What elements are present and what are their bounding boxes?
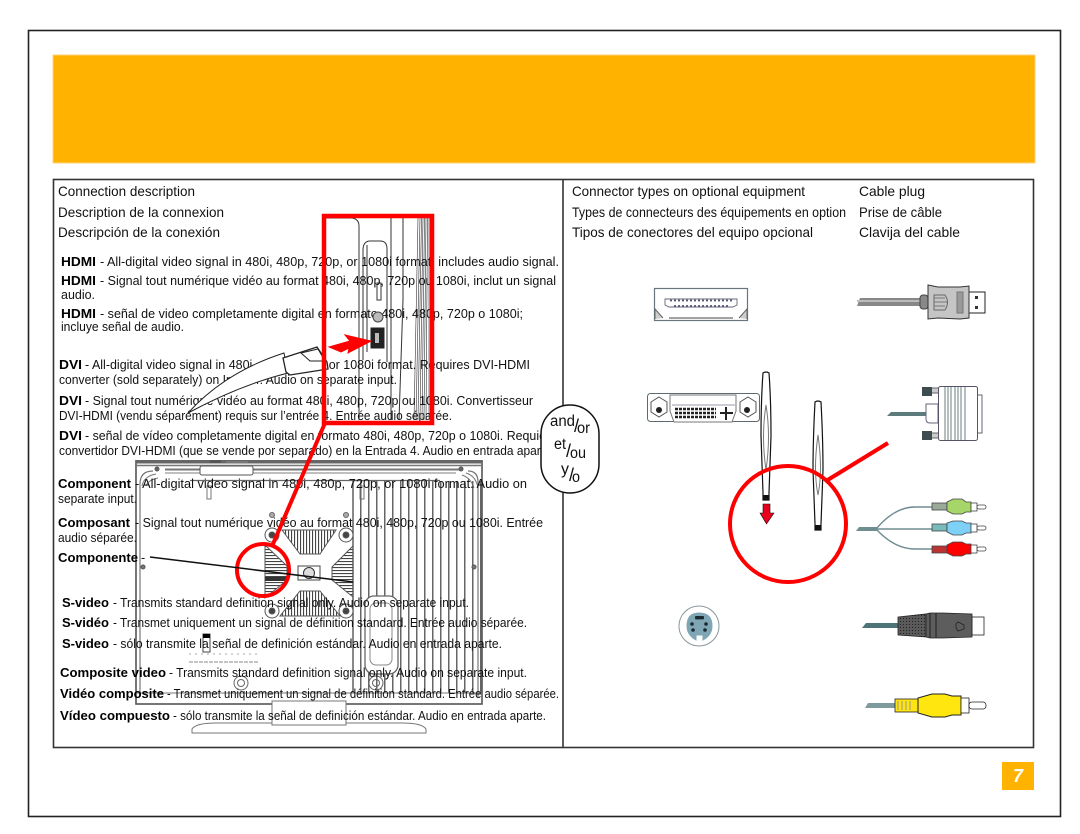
callout: and/or oval: o xyxy=(572,469,580,486)
icon: HDMI port panel details xyxy=(371,312,384,348)
callout: and/or oval: and xyxy=(550,413,575,430)
column heading: connector types xyxy=(572,183,846,240)
illustration: TV side panel lines xyxy=(325,218,429,420)
DVI descriptions: convertidor DVI-HDMI (que se vende por separado) en la Entrada 4. Audio en entrada aparte. xyxy=(59,444,554,458)
Composite video descriptions: - Transmits standard definition signal only. Audio on separate input. xyxy=(169,666,527,680)
HDMI descriptions: HDMI xyxy=(61,255,96,269)
column heading: connector types: Connector types on optional equipment xyxy=(572,183,805,199)
DVI descriptions: DVI-HDMI (vendu séparément) requis sur l’entrée 4. Entrée audio séparée. xyxy=(59,409,452,423)
icon: S-video plug xyxy=(862,613,984,638)
callout: and/or oval: / xyxy=(566,441,571,461)
DVI descriptions: converter (sold separately) on Input 4. Audio on separate input. xyxy=(59,373,397,387)
column heading: connection description: Description de la connexion xyxy=(58,204,224,220)
icon: DVI plug xyxy=(887,386,982,440)
Composite video descriptions: - sólo transmite la señal de definición estándar. Audio en entrada aparte. xyxy=(173,709,546,723)
HDMI descriptions: - Signal tout numérique vidéo au format 480i, 480p, 720p ou 1080i, inclut un signal xyxy=(100,274,556,288)
table panel xyxy=(54,179,1034,748)
callout: and/or oval xyxy=(541,405,599,493)
page number badge xyxy=(1002,762,1034,790)
S-video descriptions: S-vidéo xyxy=(62,616,109,630)
icon: S-video socket xyxy=(679,606,719,646)
Composite video descriptions: Vídeo compuesto xyxy=(60,709,170,723)
callout: and/or oval: y xyxy=(561,461,569,478)
column heading: connection description: Descripción de la conexión xyxy=(58,224,220,240)
HDMI descriptions xyxy=(61,255,559,334)
HDMI descriptions: HDMI xyxy=(61,274,96,288)
HDMI descriptions: - All-digital video signal in 480i, 480p, 720p, or 1080i format, includes audio signal. xyxy=(100,255,559,269)
DVI descriptions: - señal de vídeo completamente digital en formato 480i, 480p, 720p o 1080i. Requiere xyxy=(85,429,557,443)
DVI descriptions: - All-digital video signal in 480i, 480p, 720p, or 1080i format. Requires DVI-HDMI xyxy=(85,358,530,372)
S-video descriptions: - Transmits standard definition signal only. Audio on separate input. xyxy=(113,596,469,610)
DVI descriptions: DVI xyxy=(59,429,82,443)
blue plug xyxy=(932,521,986,535)
Component descriptions: - xyxy=(141,551,145,565)
icon: DVI socket xyxy=(648,394,760,422)
S-video descriptions: - Transmet uniquement un signal de définition standard. Entrée audio séparée. xyxy=(113,616,527,630)
column heading: connector types: Types de connecteurs des équipements en option xyxy=(572,204,846,220)
column heading: cable plug: Clavija del cable xyxy=(859,224,960,240)
red plug xyxy=(932,542,986,556)
S-video descriptions: S-video xyxy=(62,596,109,610)
green plug xyxy=(932,499,986,514)
Component descriptions: Composant xyxy=(58,516,131,530)
S-video descriptions xyxy=(62,596,527,651)
illustration: TV rear view xyxy=(136,460,482,704)
Component descriptions: Component xyxy=(58,477,132,491)
icon: antenna right xyxy=(813,401,823,530)
illustration: TV stand xyxy=(192,701,426,733)
Component descriptions: separate input. xyxy=(58,492,137,506)
icon: composite plug xyxy=(865,694,986,717)
HDMI descriptions: - señal de video completamente digital en formato 480i, 480p, 720p o 1080i; xyxy=(100,307,523,321)
HDMI descriptions: HDMI xyxy=(61,307,96,321)
HDMI descriptions: audio. xyxy=(61,288,95,302)
highlight: red pointer line xyxy=(826,443,888,481)
Composite video descriptions: Vidéo composite xyxy=(60,687,164,701)
Component descriptions: Componente xyxy=(58,551,138,565)
callout: and/or oval: ou xyxy=(570,445,586,462)
icon: antenna left xyxy=(761,372,771,500)
page number badge: 7 xyxy=(1013,766,1024,786)
HDMI descriptions: incluye señal de audio. xyxy=(61,320,184,334)
highlight: red circle on antennas xyxy=(730,466,846,582)
Component descriptions: - Signal tout numérique vidéo au format 480i, 480p, 720p ou 1080i. Entrée xyxy=(135,516,543,530)
column heading: cable plug: Cable plug xyxy=(859,183,925,199)
S-video descriptions: S-video xyxy=(62,637,109,651)
yellow title banner xyxy=(53,55,1035,163)
connection description text xyxy=(58,183,559,723)
highlight: red zoom pointer line xyxy=(273,423,325,544)
black pointer line xyxy=(150,557,353,582)
arrow: red down arrow xyxy=(760,504,774,524)
highlight: red zoom box xyxy=(324,216,432,423)
Composite video descriptions: Composite video xyxy=(60,666,166,680)
column heading: cable plug: Prise de câble xyxy=(859,204,942,220)
Composite video descriptions: - Transmet uniquement un signal de définition standard. Entrée audio séparée. xyxy=(167,687,559,701)
Component descriptions: audio séparée. xyxy=(58,531,137,545)
column heading: connection description xyxy=(58,183,224,240)
Composite video descriptions xyxy=(60,666,559,723)
DVI descriptions xyxy=(59,358,557,458)
icon: component RCA plugs xyxy=(856,499,986,556)
DVI descriptions: DVI xyxy=(59,394,82,408)
icon: cable connector going into HDMI port xyxy=(188,347,328,413)
Component descriptions xyxy=(58,477,543,565)
column heading: connector types: Tipos de conectores del equipo opcional xyxy=(572,224,813,240)
S-video descriptions: - sólo transmite la señal de definición estándar. Audio en entrada aparte. xyxy=(113,637,502,651)
DVI descriptions: - Signal tout numérique vidéo au format 480i, 480p, 720p ou 1080i. Convertisseur xyxy=(85,394,533,408)
callout: and/or oval: et xyxy=(554,436,567,453)
arrow: red arrow to HDMI port xyxy=(329,335,371,353)
column heading: connection description: Connection description xyxy=(58,183,195,199)
callout: and/or oval: / xyxy=(569,465,574,485)
DVI descriptions: DVI xyxy=(59,358,82,372)
illustration detail: VESA mount plate xyxy=(265,512,353,618)
callout: and/or oval: or xyxy=(577,420,590,437)
icon: HDMI plug xyxy=(857,285,985,319)
highlight: red circle on TV xyxy=(237,544,289,596)
icon: HDMI socket xyxy=(654,288,748,320)
column heading: cable plug xyxy=(859,183,960,240)
Component descriptions: - All-digital video signal in 480i, 480p, 720p, or 1080i format. Audio on xyxy=(135,477,527,491)
callout: and/or oval: / xyxy=(574,416,579,436)
